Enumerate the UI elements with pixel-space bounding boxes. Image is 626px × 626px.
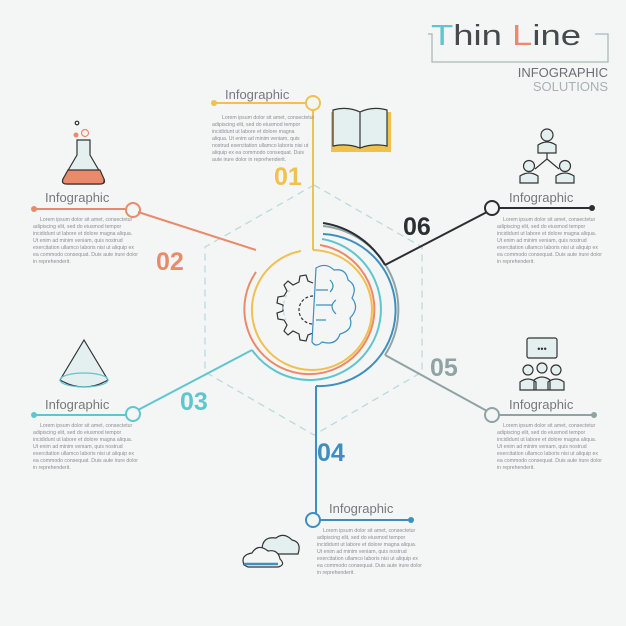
branch 05: ea commodo consequat. Duis aute irure dolor [497, 458, 602, 464]
branch 05: Infographic [509, 397, 574, 412]
branch 02: 02 [156, 248, 184, 276]
branch 01: nostrud exercitation ullamco laboris nisi ut [212, 143, 309, 149]
branch 02: incididunt ut labore et dolore magna aliqua. [33, 231, 132, 237]
branch 06: Ut enim ad minim veniam, quis nostrud [497, 238, 587, 244]
branch 04: Ut enim ad minim veniam, quis nostrud [317, 549, 407, 555]
logo: Thin Line: Thin Line [431, 20, 581, 52]
branch 03: Ut enim ad minim veniam, quis nostrud [33, 444, 123, 450]
branch 03: Lorem ipsum dolor sit amet, consectetur [40, 423, 133, 429]
branch 06 [385, 190, 602, 265]
branch 05: adipiscing elit, sed do eiusmod tempor [497, 430, 586, 436]
branch 06: in reprehenderit. [497, 259, 535, 265]
branch 01: 01 [274, 163, 302, 191]
branch 03: 03 [180, 388, 208, 416]
branch 04: Lorem ipsum dolor sit amet, consectetur [323, 528, 416, 534]
branch 05: in reprehenderit. [497, 465, 535, 471]
branch 06: Infographic [509, 190, 574, 205]
branch 01: aute irure dolor in reprehenderit. [212, 157, 286, 163]
branch 02: Ut enim ad minim veniam, quis nostrud [33, 238, 123, 244]
icon: cone [60, 340, 108, 387]
branch 01: Lorem ipsum dolor sit amet, consectetur [222, 115, 315, 121]
branch 03: in reprehenderit. [33, 465, 71, 471]
logo: Thin Line: INFOGRAPHIC [518, 65, 608, 80]
branch 04: in reprehenderit. [317, 570, 355, 576]
branch 05: Ut enim ad minim veniam, quis nostrud [497, 444, 587, 450]
branch 06: adipiscing elit, sed do eiusmod tempor [497, 224, 586, 230]
central rings [244, 223, 398, 386]
branch 04 [306, 386, 422, 576]
branch 03: incididunt ut labore et dolore magna aliqua. [33, 437, 132, 443]
branch 06: ea commodo consequat. Duis aute irure dolor [497, 252, 602, 258]
icon: flask [62, 121, 104, 184]
branch 01: Infographic [225, 87, 290, 102]
branch 01: aliqua. Ut enim ad minim veniam, quis [212, 136, 300, 142]
branch 06: exercitation ullamco laboris nisi ut aliquip ex [497, 245, 598, 251]
branch 02 [31, 190, 256, 276]
dashed hexagon [205, 185, 422, 435]
branch 02: Infographic [45, 190, 110, 205]
branch 01: aliquip ex ea commodo consequat. Duis [212, 150, 304, 156]
branch 05: 05 [430, 354, 458, 382]
branch 06: Lorem ipsum dolor sit amet, consectetur [503, 217, 596, 223]
branch 03: ea commodo consequat. Duis aute irure dolor [33, 458, 138, 464]
branch 06: 06 [403, 213, 431, 241]
branch 02: adipiscing elit, sed do eiusmod tempor [33, 224, 122, 230]
icon: chat group [520, 338, 564, 390]
branch 03 [31, 350, 252, 471]
branch 04: exercitation ullamco laboris nisi ut aliquip ex [317, 556, 418, 562]
branch 02: exercitation ullamco laboris nisi ut aliquip ex [33, 245, 134, 251]
icon: chat group: ••• [537, 344, 547, 354]
branch 02: ea commodo consequat. Duis aute irure dolor [33, 252, 138, 258]
icon: people hierarchy [520, 129, 574, 183]
branch 04: adipiscing elit, sed do eiusmod tempor [317, 535, 406, 541]
branch 03: adipiscing elit, sed do eiusmod tempor [33, 430, 122, 436]
branch 04: Infographic [329, 501, 394, 516]
branch 02: Lorem ipsum dolor sit amet, consectetur [40, 217, 133, 223]
branch 02: in reprehenderit. [33, 259, 71, 265]
branch 04: 04 [317, 439, 345, 467]
icon: gear and brain [277, 265, 356, 345]
branch 05: exercitation ullamco laboris nisi ut aliquip ex [497, 451, 598, 457]
logo: Thin Line [428, 20, 608, 94]
branch 05: Lorem ipsum dolor sit amet, consectetur [503, 423, 596, 429]
branch 03: exercitation ullamco laboris nisi ut aliquip ex [33, 451, 134, 457]
icon: book [331, 108, 391, 152]
branch 06: incididunt ut labore et dolore magna aliqua. [497, 231, 596, 237]
branch 01: incididunt ut labore et dolore magna [212, 129, 295, 135]
branch 01: adipiscing elit, sed do eiusmod tempor [212, 122, 301, 128]
branch 01 [211, 87, 320, 250]
logo: Thin Line: SOLUTIONS [533, 79, 608, 94]
branch 03: Infographic [45, 397, 110, 412]
icon: clouds [243, 535, 299, 567]
branch 04: ea commodo consequat. Duis aute irure dolor [317, 563, 422, 569]
branch 05: incididunt ut labore et dolore magna aliqua. [497, 437, 596, 443]
branch 04: incididunt ut labore et dolore magna aliqua. [317, 542, 416, 548]
branch 05 [385, 354, 602, 471]
